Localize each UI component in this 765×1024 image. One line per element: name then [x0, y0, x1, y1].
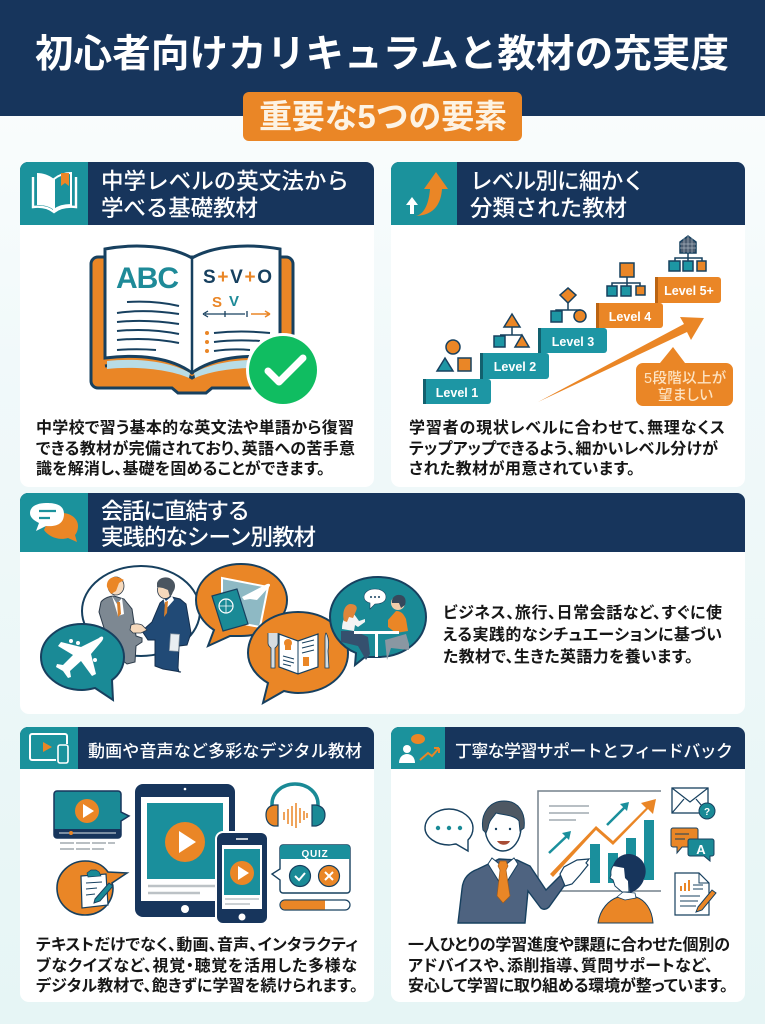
body text: た教材で、生きた英語力を養います。 [443, 647, 693, 666]
body text: アドバイスや、添削指導、質問サポートなど、 [408, 956, 713, 975]
step: Level 1 [423, 379, 491, 404]
panel header: 実践的なシーン別教材 [101, 525, 316, 550]
shapes: level 2 [494, 314, 529, 347]
callout: five levels: 望ましい [658, 387, 713, 404]
step: Level 2: Level 2 [494, 360, 536, 374]
illustration: phone [216, 832, 268, 924]
body text: ブなクイズなど、視覚・聴覚を活用した多様な [36, 956, 357, 975]
panel header: 丁寧な学習サポートとフィードバック [455, 742, 733, 761]
step: Level 4 [596, 303, 663, 328]
panel header: 学べる基礎教材 [101, 196, 258, 221]
panel: support [391, 727, 745, 1002]
bubble: airplane [41, 624, 124, 700]
step: Level 4: Level 4 [609, 310, 651, 324]
header banner [0, 0, 765, 116]
callout: five levels [636, 347, 733, 406]
step: Level 3 [538, 328, 607, 353]
body text [36, 418, 355, 478]
panel header: 分類された教材 [470, 196, 627, 221]
icon: clipboard [57, 861, 127, 915]
arrow: upward progress [538, 317, 704, 402]
icon: headphones [266, 784, 325, 828]
body text: テキストだけでなく、動画、音声、インタラクティ [36, 936, 358, 954]
panel header [391, 162, 745, 225]
panel: levels [391, 162, 745, 487]
illustration: teacher [458, 801, 589, 923]
illustration: speech bubble [425, 809, 473, 851]
shapes: level 1 [437, 340, 471, 371]
body text: 学習者の現状レベルに合わせて、無理なくス [409, 418, 725, 437]
panel header: 会話に直結する [101, 499, 250, 524]
quiz card [272, 845, 350, 910]
step: Level 1: Level 1 [436, 386, 478, 400]
body text: デジタル教材で、飽きずに学習を続けられます。 [36, 976, 358, 995]
body text: 安心して学習に取り組める環境が整っています。 [408, 976, 728, 995]
shapes: level 3 [551, 288, 586, 322]
icon: chat answer [671, 828, 714, 861]
panel: digital [20, 727, 374, 1002]
illustration: open book: V [229, 293, 239, 310]
body text [443, 603, 722, 666]
subtitle pill: 重要な5つの要素 [259, 98, 507, 135]
panel header: 中学レベルの英文法から [101, 169, 349, 194]
panel header: 動画や音声など多彩なデジタル教材 [88, 741, 362, 761]
panel header [391, 727, 745, 769]
illustration: open book: S+V+O [203, 267, 272, 288]
body text: ビジネス、旅行、日常会話など、すぐに使 [443, 603, 722, 622]
illustration: video player [54, 791, 129, 849]
body text [408, 935, 730, 995]
body text: 一人ひとりの学習進度や課題に合わせた個別の [408, 935, 730, 954]
icon: check mark [246, 333, 320, 407]
body text: テップアップできるよう、細かいレベル分けが [409, 439, 718, 458]
title: 初心者向けカリキュラムと教材の充実度 [35, 33, 729, 76]
step: Level 2 [480, 353, 549, 379]
illustration: level staircase [423, 236, 733, 406]
left businessman [99, 577, 142, 664]
panel: basics [20, 162, 374, 487]
shapes: level 5 [669, 236, 706, 271]
step: Level 3: Level 3 [552, 335, 594, 349]
bubble: cafe conversation [330, 577, 426, 665]
icon: chat answer: A [696, 842, 706, 857]
quiz card: QUIZ [301, 849, 329, 860]
body text: された教材が用意されています。 [409, 459, 635, 478]
panel: conversation [20, 493, 745, 714]
illustration: tablet [135, 784, 235, 917]
body text: できる教材が完備されており、英語への苦手意 [36, 439, 355, 458]
body text: える実践的なシチュエーションに基づい [443, 626, 722, 644]
bubble: business handshake [82, 566, 200, 672]
callout: five levels: 5段階以上が [644, 369, 727, 387]
illustration: open book [91, 246, 320, 407]
subtitle pill [243, 92, 522, 141]
body text: 識を解消し、基礎を固めることができます。 [36, 459, 325, 478]
panel header: レベル別に細かく [470, 169, 645, 194]
bubble: restaurant menu [248, 612, 348, 703]
illustration: open book: ABC [116, 262, 179, 295]
icon: mail with question [672, 788, 715, 819]
illustration: student [598, 854, 653, 923]
icon: document with pencil [675, 873, 716, 915]
icon: mail with question: ? [704, 807, 710, 818]
panel header [20, 162, 374, 225]
body text [36, 936, 358, 995]
shapes: level 4 [607, 263, 645, 296]
right businessman [130, 577, 191, 672]
illustration: open book: S [212, 294, 222, 311]
illustration: growth chart board [538, 791, 661, 891]
panel header [20, 493, 745, 552]
body text [409, 418, 725, 478]
body text: 中学校で習う基本的な英文法や単語から復習 [36, 418, 354, 437]
step: Level 5+ [655, 277, 721, 303]
step: Level 5+: Level 5+ [664, 284, 714, 298]
panel header [20, 727, 374, 769]
bubble: passport and travel [196, 564, 287, 646]
